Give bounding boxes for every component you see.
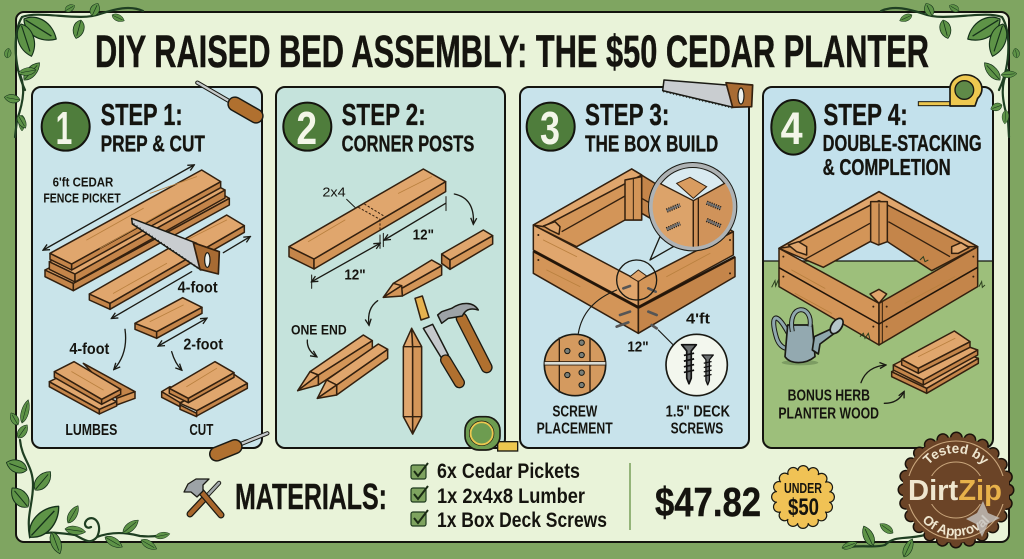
under $50 badge <box>776 470 830 524</box>
step 1 contents <box>42 83 267 454</box>
magnifier callout <box>650 165 737 260</box>
panel: step 1 background <box>32 87 262 448</box>
step 3 number badge: 3 <box>540 102 560 154</box>
curved arrow to cut post <box>454 194 473 224</box>
panel: step 4 background <box>763 87 993 448</box>
label: 4-foot left: 4-foot <box>69 341 109 358</box>
label: 12 inch right: 12" <box>413 227 434 243</box>
panel: step 3 background <box>520 87 749 448</box>
icon: saw top <box>663 80 753 108</box>
step 3 heading <box>585 98 718 157</box>
step 2 contents <box>283 98 518 451</box>
arrow: one end <box>307 340 317 357</box>
icon: lumber stack <box>49 362 135 414</box>
step 1 number badge <box>42 102 90 154</box>
icon: tape measure top <box>918 75 982 106</box>
under $50 badge: UNDER <box>784 481 822 497</box>
label: screw placement <box>537 404 613 437</box>
label: 2-foot: 2-foot <box>183 336 223 353</box>
vine: left side <box>4 66 37 137</box>
label: cut: CUT <box>189 422 213 439</box>
vine: top right <box>881 1 1020 90</box>
step 4 contents <box>771 75 985 422</box>
seal: DirtZip tested by of approval: Tested by <box>922 444 988 464</box>
label: bonus herb planter wood: PLANTER WOOD <box>778 405 879 422</box>
step 4 heading: & COMPLETION <box>823 154 951 180</box>
label: 12 inch: 12" <box>627 340 649 356</box>
curved arrow to posts <box>369 301 378 325</box>
label: 2x4 with leader <box>322 185 355 207</box>
dimension arrow: right of board <box>223 237 250 253</box>
icon: watering can <box>774 310 846 365</box>
checklist: 6x Cedar Pickets <box>437 460 580 483</box>
step 1 heading: STEP 1: <box>101 98 183 132</box>
checklist <box>411 460 607 532</box>
icon: cut stack <box>162 362 247 417</box>
panel: step 2 background <box>276 87 505 448</box>
label: fence picket: FENCE PICKET <box>43 191 121 206</box>
step 1 heading: PREP & CUT <box>101 131 205 157</box>
seal: DirtZip tested by of approval: Of Approval <box>924 514 990 539</box>
icon: two pointed posts <box>298 335 388 398</box>
label: screw placement: SCREW <box>552 404 598 421</box>
under $50 badge: $50 <box>788 494 819 521</box>
step 3 number badge <box>527 102 575 154</box>
icon: chisel <box>423 324 459 383</box>
step 2 number badge <box>283 102 331 154</box>
divider <box>629 463 631 530</box>
icon: 2-foot board <box>135 298 202 338</box>
icon: herb planter wood stack <box>892 331 978 393</box>
icon: 4-foot board <box>89 215 244 309</box>
leader lines <box>578 290 673 345</box>
step 3 heading: STEP 3: <box>585 98 669 132</box>
step 3 heading: THE BOX BUILD <box>585 131 718 157</box>
icon: screwdriver top <box>197 83 256 116</box>
dimension arrow: 4-foot <box>112 272 192 318</box>
step 4 heading: STEP 4: <box>823 98 908 132</box>
label: 12 inch left: 12" <box>344 267 366 283</box>
label: 4 ft: 4'ft <box>686 311 710 327</box>
vine: right side <box>989 70 1017 137</box>
icon: pointed post <box>383 260 442 297</box>
curved arrow to lumber <box>114 329 126 369</box>
icon: screwdriver bottom <box>217 433 267 454</box>
step 2 heading: STEP 2: <box>342 98 426 132</box>
vine: bottom right <box>841 521 925 559</box>
small focus circle <box>617 260 657 300</box>
label: deck screws: SCREWS <box>671 420 724 437</box>
label: lumbes: LUMBES <box>65 422 118 439</box>
vine: top left <box>4 1 143 90</box>
arrow: to wood bottom <box>884 392 904 403</box>
grass tufts <box>772 257 985 339</box>
circle: deck screws <box>666 334 727 396</box>
step 1 heading <box>101 98 205 157</box>
step 3 contents <box>527 80 753 437</box>
step 2 heading <box>342 98 474 157</box>
seal: DirtZip tested by of approval: DirtZip <box>908 475 1002 507</box>
step 4 heading <box>823 98 982 180</box>
step 4 number badge: 4 <box>781 103 803 154</box>
icon: 2x4 board <box>289 169 446 269</box>
curved arrow to cut <box>172 352 182 370</box>
vine: bottom left <box>4 399 171 555</box>
step 4 number badge <box>771 100 815 155</box>
arrow: to wood top <box>861 365 886 383</box>
materials row <box>184 460 830 532</box>
step 2 number badge: 2 <box>296 102 317 154</box>
label: 2x4 with leader: 2x4 <box>322 185 346 200</box>
label: bonus herb planter wood: BONUS HERB <box>788 388 870 405</box>
icon: double pointed post <box>403 328 422 434</box>
step 2 heading: CORNER POSTS <box>342 131 474 157</box>
icon: planter box <box>533 169 735 333</box>
label: fence picket: 6'ft CEDAR <box>53 175 114 190</box>
label: deck screws <box>666 404 730 437</box>
seal: DirtZip tested by of approval <box>898 432 1014 548</box>
icon: hand saw <box>132 218 219 274</box>
label: one end: ONE END <box>291 321 347 337</box>
label: deck screws: 1.5" DECK <box>666 404 730 421</box>
label: bonus herb planter wood <box>778 388 879 422</box>
icon: tape measure <box>465 417 518 451</box>
icon: completed raised bed <box>779 192 978 345</box>
icon: cedar picket stack <box>45 170 229 291</box>
icon: hammer <box>438 304 487 367</box>
materials heading: MATERIALS: <box>235 476 387 517</box>
step 1 number badge: 1 <box>56 102 72 154</box>
icon: hammer and screwdriver <box>184 479 221 515</box>
price: $47.82 <box>655 479 761 525</box>
label: screw placement: PLACEMENT <box>537 420 613 437</box>
dimension arrows: 12 inches <box>312 197 446 288</box>
dimension arrow: 2-foot <box>158 318 207 346</box>
icon: offcut <box>415 296 429 320</box>
checklist: 1x 2x4x8 Lumber <box>437 485 585 508</box>
checklist: 1x Box Deck Screws <box>437 509 607 532</box>
circle: screw placement <box>544 334 606 396</box>
label: 4-foot right: 4-foot <box>178 280 218 297</box>
label: fence picket <box>43 175 121 206</box>
dimension arrow: 6 ft <box>43 165 194 250</box>
icon: cut block <box>442 230 493 269</box>
